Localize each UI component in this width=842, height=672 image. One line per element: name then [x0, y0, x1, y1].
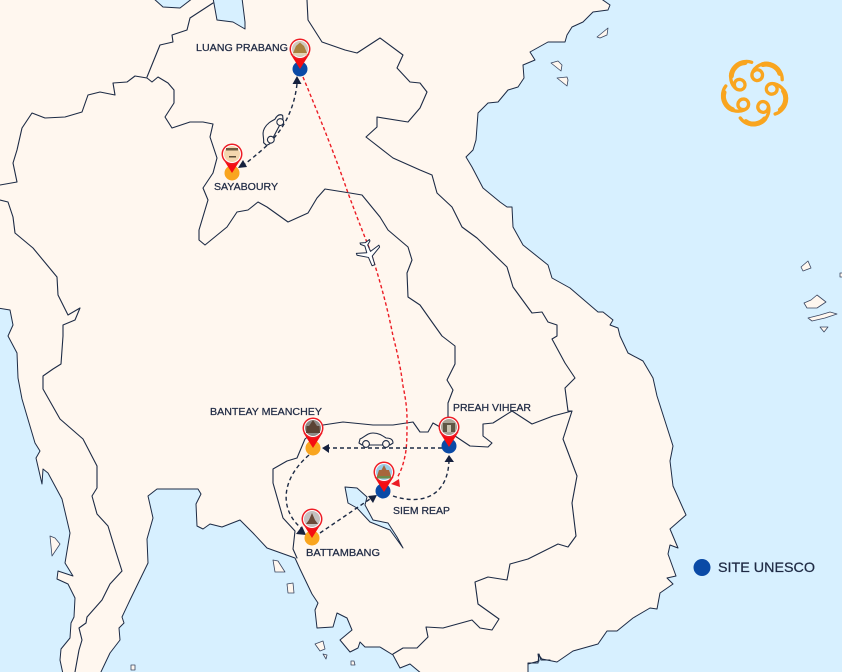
- logo: [718, 59, 793, 131]
- sea: East Sea: [466, 0, 842, 672]
- label: Sayaboury: SAYABOURY: [214, 181, 278, 193]
- icon: car near Sayaboury: [258, 111, 287, 147]
- label: Battambang: BATTAMBANG: [306, 547, 380, 559]
- icon: airplane: [353, 237, 385, 269]
- pin: Luang Prabang: [290, 38, 310, 76]
- lake: northern water body: [213, 0, 245, 29]
- route: Battambang to Siem Reap: [320, 495, 377, 533]
- label: Banteay Meanchey: BANTEAY MEANCHEY: [210, 406, 322, 418]
- lake: Tonle Sap: [345, 487, 403, 548]
- pin: Siem Reap: [374, 462, 394, 498]
- route: Siem Reap to Preah Vihear: [393, 455, 454, 500]
- route: Banteay Meanchey to Battambang: [286, 455, 309, 535]
- sea: Andaman Sea: [0, 308, 75, 672]
- pin: Sayaboury: [222, 144, 242, 180]
- lake: northern water body west: [153, 0, 193, 8]
- country borders: [0, 0, 577, 672]
- label: Siem Reap: SIEM REAP: [393, 505, 450, 517]
- route: Preah Vihear to Banteay Meanchey: [322, 444, 442, 453]
- pin: Battambang: [302, 508, 322, 546]
- icon: car near Preah Vihear: [359, 433, 393, 447]
- legend: site UNESCO: SITE UNESCO: [718, 559, 815, 575]
- pin: Preah Vihear: [438, 416, 460, 454]
- sea: Gulf of Thailand: [100, 489, 422, 672]
- label: Luang Prabang: LUANG PRABANG: [196, 42, 288, 54]
- pin: Banteay Meanchey: [302, 418, 324, 456]
- route: flight Luang Prabang to Siem Reap: [303, 77, 407, 487]
- label: Preah Vihear: PREAH VIHEAR: [453, 402, 531, 414]
- route: car Luang Prabang to Sayaboury: [238, 76, 302, 168]
